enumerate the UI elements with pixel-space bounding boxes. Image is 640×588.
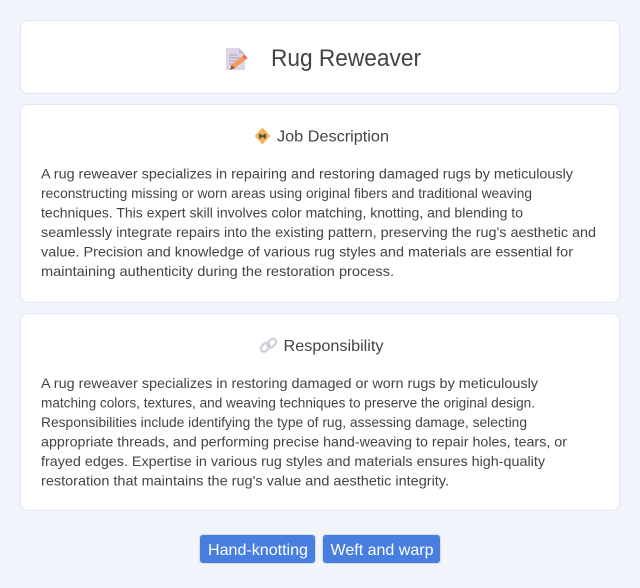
text block: responsibility: matching colors, textures, and weaving techniques to preserve the original design. [41,394,535,410]
icon: document with pencil [226,48,248,70]
icon: chain link [259,337,278,353]
text block: responsibility: appropriate threads, and performing precise hand-weaving to repair holes, tears, or [41,434,567,450]
text block: responsibility: frayed edges. Expertise in various rug styles and materials ensures high-quality [41,453,545,469]
tag: hand-knotting [199,534,316,564]
text block: job description [41,166,596,279]
text block: responsibility: restoration that maintains the rug's value and aesthetic integrity. [41,472,449,488]
tag: hand-knotting: Hand-knotting [208,542,308,559]
title: Rug Reweaver [271,45,421,72]
text block: job description: value. Precision and knowledge of various rug styles and materials are essential for [41,244,573,260]
tag: weft and warp: Weft and warp [330,542,434,559]
heading: responsibility: Responsibility [284,338,384,355]
text block: job description: seamlessly integrate repairs into the existing pattern, preserving the rug's aesthetic and [41,224,596,240]
text block: job description: maintaining authenticity during the restoration process. [41,263,394,279]
panel: title card [20,20,620,94]
text block: responsibility: Responsibilities include identifying the type of rug, assessing damage, selecting [41,414,527,430]
text block: responsibility [41,375,567,488]
text block: responsibility: A rug reweaver specializes in restoring damaged or worn rugs by meticulously [41,375,538,391]
panel: responsibility [20,313,620,511]
text block: job description: A rug reweaver specializes in repairing and restoring damaged rugs by meticulously [41,166,573,182]
heading: job description: Job Description [277,128,389,146]
icon: orange diamond [256,129,269,143]
panel: job description [20,104,620,303]
text block: job description: techniques. This expert skill involves color matching, knotting, and blending to [41,204,523,220]
tag: weft and warp [322,534,441,564]
text block: job description: reconstructing missing or worn areas using original fibers and traditional weaving [41,185,532,201]
